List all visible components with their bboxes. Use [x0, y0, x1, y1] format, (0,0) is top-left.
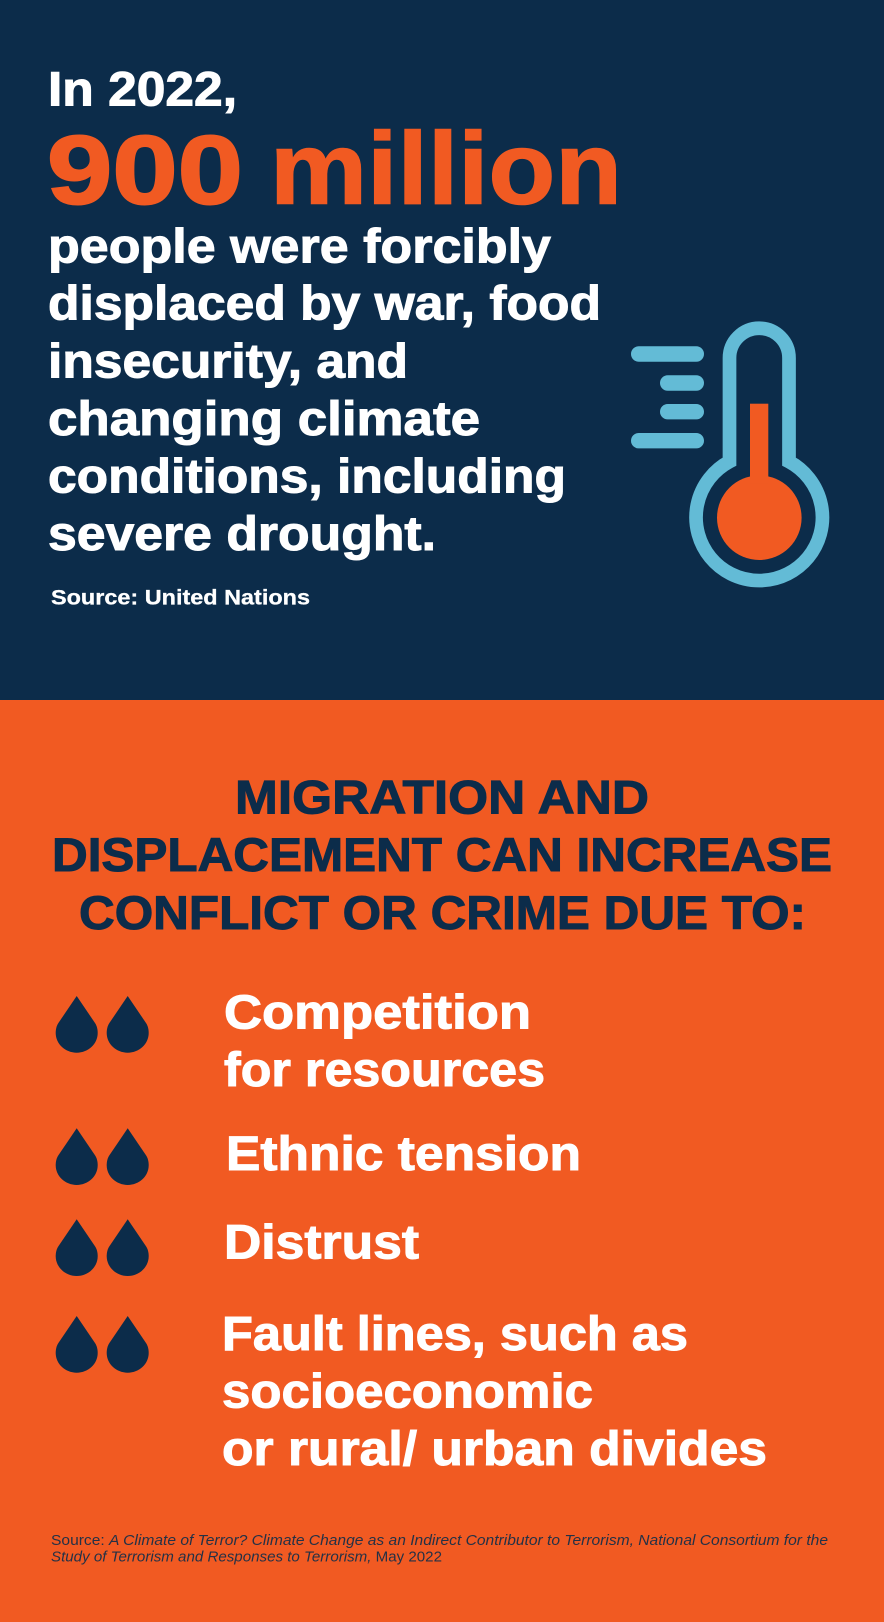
- headline: statistic text: severe drought.: [48, 508, 436, 561]
- list item: competition for resources: [224, 986, 545, 1097]
- panel: top navy statistic panel: [0, 0, 884, 700]
- headline: statistic text: people were forcibly: [48, 220, 551, 274]
- list item: fault lines: Fault lines, such as: [222, 1308, 688, 1361]
- list item: competition for resources: Competition: [224, 986, 531, 1040]
- headline: statistic text: In 2022,: [48, 64, 237, 117]
- heading: migration and displacement: CONFLICT OR CRIME DUE TO:: [79, 886, 806, 939]
- list item: fault lines: socioeconomic: [222, 1366, 593, 1418]
- list item: fault lines: [222, 1308, 767, 1476]
- footnote: source citation: Study of Terrorism and Responses to Terrorism, May 2022: [51, 1550, 442, 1566]
- headline: statistic text: changing climate: [48, 393, 480, 446]
- icon: water drops, fault lines: [56, 1316, 149, 1373]
- footnote: source citation: [51, 1533, 828, 1566]
- heading: migration and displacement: MIGRATION AND: [235, 770, 649, 824]
- footnote: source citation: Source: A Climate of Terror? Climate Change as an Indirect Contributor to Terrorism, National Consortium for the: [51, 1533, 828, 1549]
- list item: distrust: Distrust: [224, 1217, 419, 1270]
- headline: statistic text: 900: [47, 116, 243, 224]
- headline: statistic text: insecurity, and: [48, 336, 408, 389]
- heading: migration and displacement: DISPLACEMENT CAN INCREASE: [52, 828, 832, 881]
- source: United Nations: Source: United Nations: [51, 586, 310, 610]
- icon: water drops, distrust: [56, 1219, 149, 1276]
- headline: statistic text: conditions, including: [48, 450, 566, 504]
- icon: thermometer: [631, 328, 822, 581]
- list item: ethnic tension: Ethnic tension: [226, 1128, 581, 1181]
- panel: orange causes panel: [0, 700, 884, 1622]
- list item: competition for resources: for resources: [224, 1044, 545, 1097]
- list item: fault lines: or rural/ urban divides: [222, 1423, 767, 1476]
- headline: statistic text: million: [270, 112, 622, 226]
- headline: statistic text: displaced by war, food: [48, 278, 601, 330]
- heading: migration and displacement: [52, 770, 832, 939]
- headline: statistic text: [47, 64, 622, 561]
- icon: water drops, competition: [56, 996, 149, 1053]
- icon: water drops, ethnic tension: [56, 1128, 149, 1185]
